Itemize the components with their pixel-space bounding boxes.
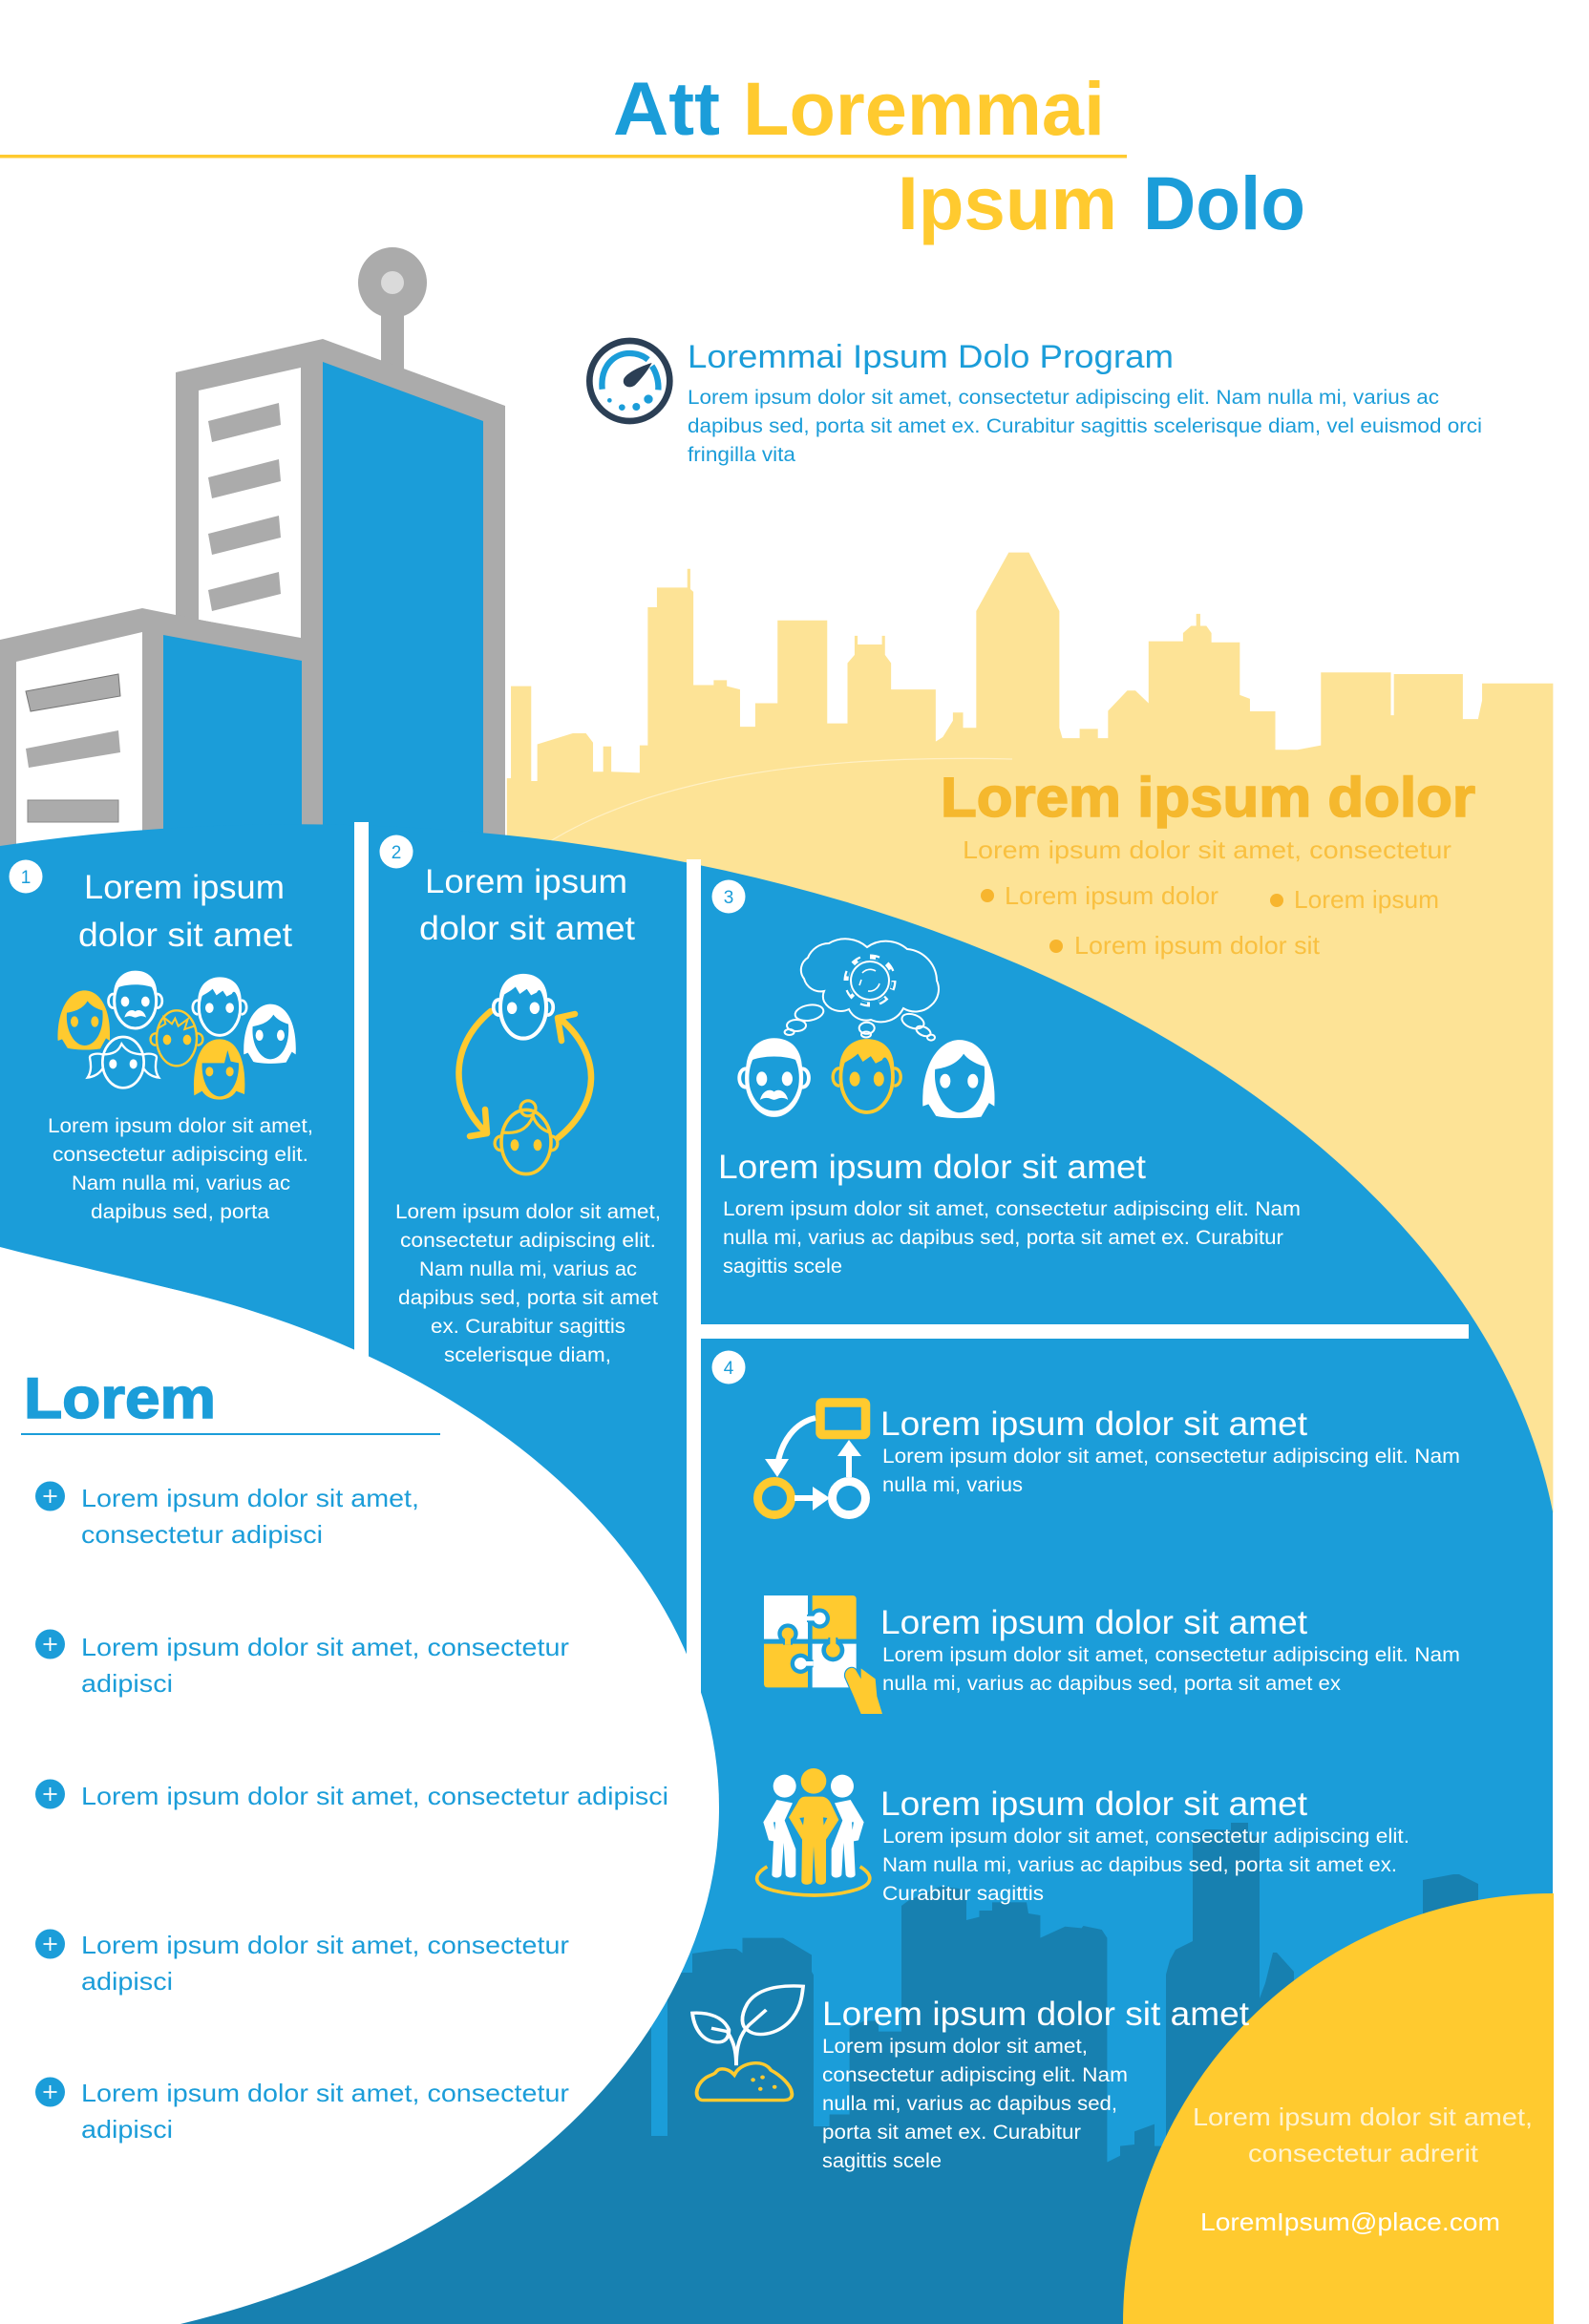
list item 2: adipisci: [81, 1669, 173, 1698]
item 4 text: sagittis scele: [822, 2150, 942, 2172]
white left panel shape: [0, 1247, 719, 2324]
title: Ipsum: [898, 160, 1117, 245]
item 3 text: Lorem ipsum dolor sit amet, consectetur adipiscing elit.: [882, 1826, 1409, 1848]
yellow section subtext and bullets: Lorem ipsum dolor sit amet, consectetur: [963, 835, 1451, 864]
panel 3 heading: Lorem ipsum dolor sit amet: [718, 1149, 1146, 1186]
panel 1 text: [48, 1115, 313, 1223]
panel 2 text: consectetur adipiscing elit.: [400, 1230, 656, 1252]
list item 1: [35, 1482, 419, 1549]
panel 2 text: Nam nulla mi, varius ac: [419, 1258, 637, 1280]
title: Loremmai: [743, 66, 1105, 151]
icon: short building: [0, 608, 323, 869]
item 2 text: [880, 1604, 1460, 1695]
icon: group of faces: [58, 971, 296, 1100]
icon: puzzle and hand: [764, 1595, 882, 1714]
icon: shared thought cloud: [785, 939, 939, 1041]
blue main shape: [0, 824, 1553, 2324]
panel 2 heading: dolor sit amet: [419, 910, 635, 947]
list item 1: Lorem ipsum dolor sit amet,: [81, 1484, 419, 1512]
yellow section subtext and bullets: Lorem ipsum: [1294, 885, 1439, 914]
program description: fringilla vita: [688, 444, 795, 466]
panel 1 text: dapibus sed, porta: [91, 1201, 269, 1223]
badge 4: 4: [724, 1359, 734, 1379]
item 2 text: Lorem ipsum dolor sit amet, consectetur adipiscing elit. Nam: [882, 1644, 1460, 1666]
item 4 text: consectetur adipiscing elit. Nam: [822, 2064, 1128, 2086]
panel 3 text: [723, 1198, 1301, 1278]
panel 1 text: Nam nulla mi, varius ac: [72, 1173, 290, 1194]
panel 1 text: consectetur adipiscing elit.: [53, 1144, 308, 1166]
icon: rotating faces: [458, 974, 591, 1174]
badge 3: [712, 880, 745, 913]
list item 2: [35, 1629, 569, 1698]
item 3 text: Lorem ipsum dolor sit amet: [880, 1785, 1307, 1823]
icon: three faces: [739, 1038, 995, 1118]
list item 5: [35, 2078, 569, 2144]
contact text: LoremIpsum@place.com: [1200, 2208, 1500, 2236]
panel 2: [380, 835, 661, 1366]
list item 4: Lorem ipsum dolor sit amet, consectetur: [81, 1931, 569, 1959]
item 1 text: nulla mi, varius: [882, 1474, 1023, 1496]
panel 2 heading: [419, 863, 635, 947]
icon: team in circle: [757, 1768, 870, 1895]
panel 3 text: sagittis scele: [723, 1256, 842, 1278]
panel 2 text: Lorem ipsum dolor sit amet,: [395, 1201, 661, 1223]
yellow contact corner: [1123, 1893, 1554, 2324]
list item 2: Lorem ipsum dolor sit amet, consectetur: [81, 1633, 569, 1661]
yellow section subtext and bullets: Lorem ipsum dolor: [1005, 881, 1218, 910]
icon: sprout: [692, 1986, 803, 2101]
panel 2 text: [395, 1201, 661, 1366]
panel 2 text: dapibus sed, porta sit amet: [398, 1287, 658, 1309]
badge 2: 2: [392, 843, 401, 863]
contact text: [1193, 2102, 1533, 2236]
badge 1: [10, 859, 42, 894]
icon: tall building: [176, 247, 505, 840]
panel 2 heading: Lorem ipsum: [425, 863, 627, 900]
badge 2: [380, 835, 413, 869]
contact text: Lorem ipsum dolor sit amet,: [1193, 2102, 1533, 2131]
badge 4: [712, 1350, 745, 1384]
program description: Lorem ipsum dolor sit amet, consectetur adipiscing elit. Nam nulla mi, varius ac: [688, 387, 1439, 409]
yellow section subtext and bullets: Lorem ipsum dolor sit: [1074, 931, 1321, 960]
list item 3: Lorem ipsum dolor sit amet, consectetur adipisci: [81, 1782, 668, 1810]
panel 2 text: scelerisque diam,: [444, 1344, 611, 1366]
panel 4: [692, 1350, 1460, 2172]
item 1 text: Lorem ipsum dolor sit amet: [880, 1405, 1307, 1443]
panel 1: [10, 859, 313, 1223]
item 1 text: [880, 1405, 1460, 1496]
panel 1 heading: Lorem ipsum: [84, 869, 285, 906]
item 4 text: Lorem ipsum dolor sit amet,: [822, 2036, 1088, 2058]
contact text: consectetur adrerit: [1248, 2139, 1479, 2167]
title: Dolo: [1143, 160, 1305, 245]
panel 1 text: Lorem ipsum dolor sit amet,: [48, 1115, 313, 1137]
heading: lorem ipsum dolor: Lorem ipsum dolor: [941, 767, 1475, 829]
item 4 text: porta sit amet ex. Curabitur: [822, 2122, 1081, 2144]
white column dividers: [354, 822, 1469, 1700]
item 2 text: nulla mi, varius ac dapibus sed, porta sit amet ex: [882, 1673, 1342, 1695]
list item 5: Lorem ipsum dolor sit amet, consectetur: [81, 2079, 569, 2107]
icon: process flow: [758, 1403, 865, 1514]
item 3 text: Nam nulla mi, varius ac dapibus sed, porta sit amet ex.: [882, 1854, 1397, 1876]
item 4 text: [822, 1996, 1249, 2172]
program description: dapibus sed, porta sit amet ex. Curabitur sagittis scelerisque diam, vel euismod orci: [688, 415, 1482, 437]
yellow city skyline background: [507, 553, 1553, 1512]
badge 1: 1: [21, 868, 31, 888]
panel 1 heading: dolor sit amet: [78, 917, 292, 954]
icon: speedometer: [589, 341, 669, 421]
program description: [688, 387, 1482, 466]
panel 3: [712, 880, 1301, 1278]
list item 5: adipisci: [81, 2115, 173, 2144]
title: [0, 66, 1305, 245]
item 4 text: nulla mi, varius ac dapibus sed,: [822, 2093, 1117, 2115]
program heading: Loremmai Ipsum Dolo Program: [688, 339, 1174, 375]
item 4 text: Lorem ipsum dolor sit amet: [822, 1996, 1249, 2033]
item 3 text: Curabitur sagittis: [882, 1883, 1044, 1905]
item 3 text: [880, 1785, 1409, 1905]
item 1 text: Lorem ipsum dolor sit amet, consectetur adipiscing elit. Nam: [882, 1446, 1460, 1468]
yellow section subtext and bullets: [963, 835, 1451, 960]
panel 2 text: ex. Curabitur sagittis: [431, 1316, 625, 1338]
dark blue skyline: [143, 1823, 1553, 2324]
list item 4: adipisci: [81, 1967, 173, 1996]
panel 3 text: Lorem ipsum dolor sit amet, consectetur adipiscing elit. Nam: [723, 1198, 1301, 1220]
list item 4: [35, 1929, 569, 1996]
title: Att: [613, 66, 720, 151]
panel 3 text: nulla mi, varius ac dapibus sed, porta sit amet ex. Curabitur: [723, 1227, 1283, 1249]
left list heading: Lorem: [24, 1366, 216, 1430]
list item 1: consectetur adipisci: [81, 1520, 323, 1549]
item 2 text: Lorem ipsum dolor sit amet: [880, 1604, 1307, 1641]
badge 3: 3: [724, 888, 733, 908]
panel 1 heading: [78, 869, 292, 954]
